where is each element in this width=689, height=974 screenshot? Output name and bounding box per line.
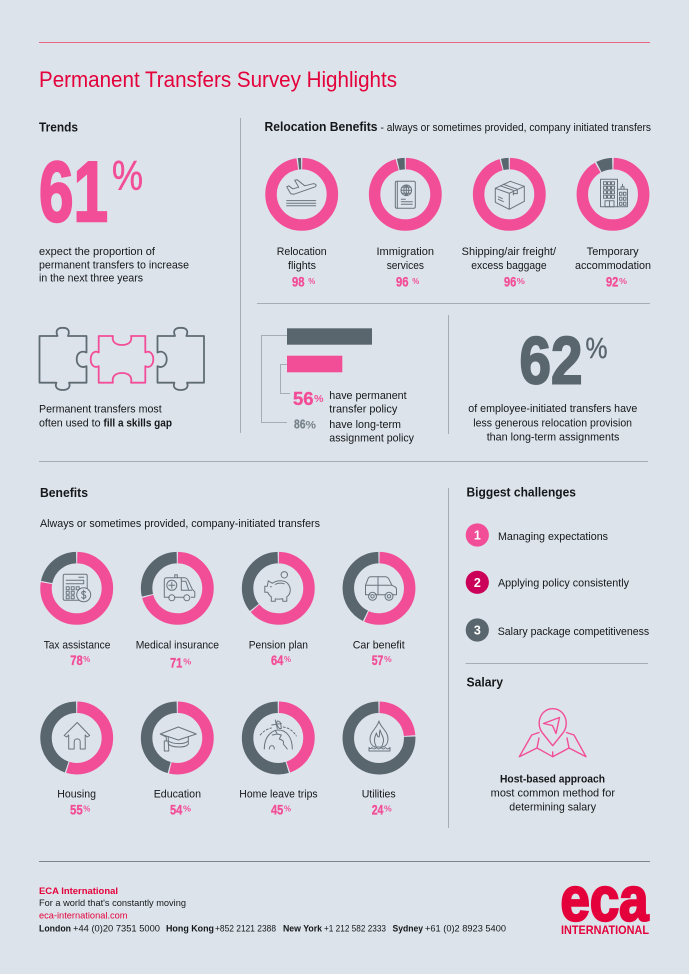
footer: contact details: +852 2121 2388 (215, 924, 276, 934)
text: permanent transfer policy (329, 390, 407, 416)
label: utilities: 24 (372, 801, 384, 817)
logo: ECA International: INTERNATIONAL (561, 925, 649, 937)
text: host-based approach: determining salary (509, 802, 597, 814)
label: medical insurance: 71 (170, 655, 182, 671)
icon: globe and plane (260, 720, 296, 749)
donut: immigration services 96% (375, 164, 436, 225)
label: immigration services: % (412, 277, 419, 286)
footer: contact details: +61 (0)2 8923 5400 (425, 924, 506, 934)
label: housing (57, 789, 96, 817)
icon: map pin (519, 709, 586, 757)
challenge 1: Managing expectations (498, 531, 609, 543)
label: shipping: 96 (504, 274, 516, 290)
icon: house (64, 722, 90, 749)
challenge 3: 3 (474, 624, 481, 638)
label: immigration services (376, 246, 434, 290)
text: 62% description: of employee-initiated transfers have (468, 403, 637, 415)
heading: relocation benefits: Relocation Benefits (264, 120, 378, 134)
footer: contact details: Sydney (392, 924, 424, 934)
label: relocation flights: % (308, 277, 315, 286)
text: long-term assignment policy: assignment policy (329, 433, 415, 445)
text: 62% description: than long-term assignments (487, 432, 620, 444)
stat: 86%: % (306, 419, 316, 431)
text: long-term assignment policy: have long-term (329, 419, 401, 431)
text: 61% description: expect the proportion of (39, 246, 156, 258)
label: immigration services: services (387, 260, 425, 272)
big stat: 61%: 61 (39, 145, 108, 240)
big stat: 62%: 62 (520, 324, 582, 398)
text: skills gap: fill a skills gap (104, 418, 172, 430)
icon: buildings (600, 179, 628, 207)
heading: relocation benefits: - always or sometimes provided, company initiated transfers (380, 122, 652, 134)
donut: shipping 96% (479, 164, 540, 225)
label: relocation flights: Relocation (277, 246, 327, 258)
stat: 56%: % (314, 393, 324, 405)
challenge 2: Applying policy consistently (498, 578, 630, 590)
label: pension plan (249, 639, 308, 668)
label: education (154, 789, 201, 817)
connector: long-term (262, 336, 287, 422)
footer: contact details: For a world that's constantly moving (39, 898, 186, 908)
icon: flame (369, 721, 390, 751)
big stat: 62%: % (586, 333, 608, 365)
donut: temporary accommodation 92% (582, 164, 644, 225)
stat: 56% (293, 389, 324, 409)
donut: medical insurance 71% (147, 558, 208, 619)
icon: ambulance (164, 575, 195, 601)
footer: contact details: London (39, 924, 71, 934)
label: home leave trips (239, 789, 318, 817)
connector: permanent (280, 364, 290, 394)
panel: 62% stat (468, 324, 637, 444)
label: shipping: Shipping/air freight/ (462, 246, 556, 258)
label: medical insurance: % (183, 658, 191, 667)
footer: contact details: eca-international.com (39, 911, 128, 921)
bar: permanent transfer policy (287, 356, 342, 372)
label: temporary accommodation: accommodation (575, 260, 651, 272)
label: education: Education (154, 789, 201, 801)
label: housing: Housing (57, 789, 96, 801)
label: housing: 55 (70, 801, 83, 817)
label: home leave trips: 45 (271, 801, 283, 817)
label: temporary accommodation: % (619, 277, 627, 286)
label: relocation flights: flights (288, 260, 317, 272)
label: tax assistance: 78 (70, 652, 83, 668)
icon: passport (395, 181, 415, 208)
bar: long-term assignment policy (287, 328, 372, 345)
heading: salary: Salary (466, 676, 503, 690)
label: tax assistance: Tax assistance (44, 639, 110, 651)
label: education: % (183, 804, 191, 813)
donut: relocation flights 98% (271, 164, 332, 225)
text: skills gap: Permanent transfers most (39, 404, 162, 416)
icon: calculator (63, 574, 91, 602)
donut: pension plan 64% (248, 558, 309, 619)
text: 62% description (468, 403, 637, 444)
heading: trends: Trends (39, 120, 78, 134)
label: temporary accommodation (575, 246, 651, 290)
label: car benefit: Car benefit (353, 639, 405, 651)
donut: housing 55% (46, 707, 107, 769)
text: host-based approach: Host-based approach (500, 774, 605, 786)
icon: piggy bank (265, 572, 290, 601)
challenge 3: Salary package competitiveness (498, 626, 650, 638)
heading: relocation benefits (264, 120, 652, 134)
text: 61% description: permanent transfers to increase (39, 260, 189, 272)
heading: biggest challenges: Biggest challenges (466, 486, 576, 500)
footer: contact details (39, 886, 506, 934)
label: tax assistance (44, 639, 110, 668)
label: immigration services: 96 (396, 274, 409, 290)
label: housing: % (83, 804, 90, 813)
panel: policy bar chart (262, 328, 415, 445)
icon: plane (287, 180, 316, 206)
stat: 86% (294, 416, 316, 431)
footer: contact details: ECA International (39, 886, 118, 896)
label: car benefit: 57 (372, 652, 384, 668)
label: shipping (462, 246, 556, 290)
logo: ECA International: eca (560, 866, 649, 934)
challenge 2: 2 (474, 576, 481, 590)
label: relocation flights: 98 (292, 274, 305, 290)
donut: car benefit 57% (348, 558, 410, 619)
label: medical insurance: Medical insurance (136, 639, 219, 651)
footer: contact details: +44 (0)20 7351 5000 (73, 924, 160, 934)
panel: biggest challenges (466, 486, 650, 642)
text: host-based approach: most common method for (491, 788, 615, 800)
text: host-based approach (491, 774, 615, 814)
icon: puzzle pieces (40, 328, 204, 390)
stat: 56%: 56 (293, 389, 314, 409)
heading: benefits: Benefits (40, 486, 88, 500)
big stat: 61%: % (112, 152, 143, 199)
footer: contact details: New York (283, 924, 323, 934)
label: utilities: Utilities (362, 789, 396, 801)
label: tax assistance: % (83, 655, 90, 664)
icon: graduation cap (160, 727, 196, 751)
text: 61% description: in the next three years (39, 272, 144, 284)
label: pension plan: 64 (271, 652, 283, 668)
label: pension plan: Pension plan (249, 639, 308, 651)
label: utilities: % (384, 804, 392, 813)
footer: contact details: Hong Kong (166, 924, 214, 934)
label: car benefit: % (384, 655, 392, 664)
text: long-term assignment policy (329, 419, 415, 445)
panel: relocation benefits (264, 120, 652, 290)
challenge 1 (466, 523, 609, 547)
label: home leave trips: % (284, 804, 291, 813)
label: utilities (362, 789, 396, 817)
text: 61% description (39, 246, 189, 284)
label: education: 54 (170, 801, 182, 817)
label: temporary accommodation: Temporary (587, 246, 639, 258)
challenge 1: 1 (474, 528, 481, 542)
label: pension plan: % (284, 655, 291, 664)
panel: salary (466, 676, 615, 814)
text: permanent transfer policy: transfer policy (329, 404, 398, 416)
donut: utilities 24% (348, 707, 410, 769)
icon: car (366, 577, 396, 600)
label: temporary accommodation: 92 (606, 274, 618, 290)
label: shipping: % (517, 277, 525, 286)
label: shipping: excess baggage (471, 260, 547, 272)
icon: box (495, 181, 524, 209)
title: Permanent Transfers Survey Highlights (39, 67, 397, 92)
panel: trends (39, 120, 204, 430)
donut: tax assistance 78% (46, 558, 107, 619)
label: immigration services: Immigration (376, 246, 434, 258)
label: relocation flights (277, 246, 327, 290)
panel: benefits (40, 486, 410, 817)
text: skills gap (39, 404, 172, 430)
label: home leave trips: Home leave trips (239, 789, 318, 801)
donut: education 54% (147, 707, 208, 769)
stat: 86%: 86 (294, 416, 306, 431)
footer: contact details: +1 212 582 2333 (324, 924, 386, 934)
donut: home leave trips 45% (248, 707, 309, 769)
text: 62% description: less generous relocation provision (473, 418, 632, 430)
text: skills gap: often used to (39, 418, 100, 430)
challenge 3 (466, 618, 650, 642)
label: medical insurance (136, 639, 219, 671)
label: car benefit (353, 639, 405, 668)
text: permanent transfer policy: have permanent (329, 390, 407, 402)
challenge 2 (466, 571, 630, 594)
text: benefits subtitle: Always or sometimes provided, company-initiated transfers (40, 518, 321, 530)
